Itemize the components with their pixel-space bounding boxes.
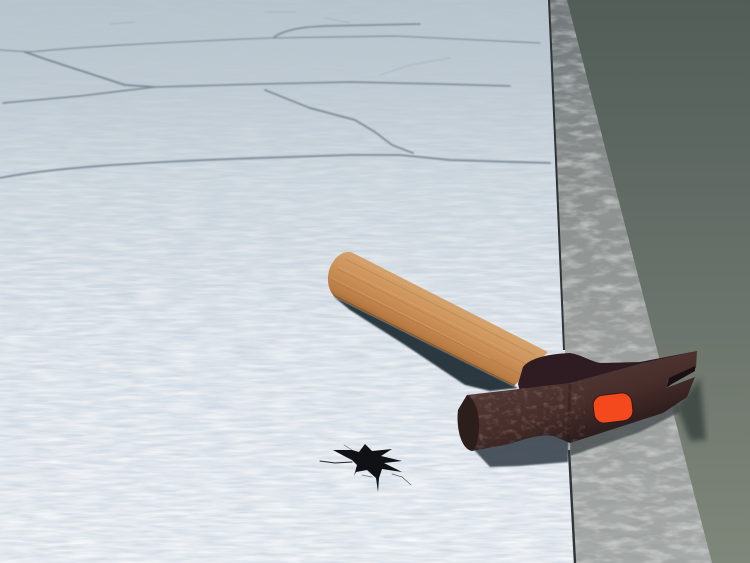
surface cracks (0, 12, 550, 178)
curb (545, 0, 715, 563)
claw slot (666, 366, 695, 388)
ice surface (0, 0, 580, 563)
shadow: hammer head on ice (465, 430, 569, 467)
orange inlay (592, 392, 634, 424)
water channel (560, 0, 750, 563)
poll striking face (458, 395, 479, 451)
hammer (328, 252, 697, 455)
shadow: hammer head on curb (570, 398, 680, 456)
handle (328, 252, 548, 386)
star-shaped hole in ice (320, 444, 411, 492)
shadow: handle (333, 296, 518, 391)
hammer head front (455, 350, 697, 455)
shadow: hammer on water (676, 378, 706, 441)
curb joint line (549, 0, 564, 350)
curb joint line lower (569, 450, 575, 563)
hammer head back face (518, 351, 697, 395)
